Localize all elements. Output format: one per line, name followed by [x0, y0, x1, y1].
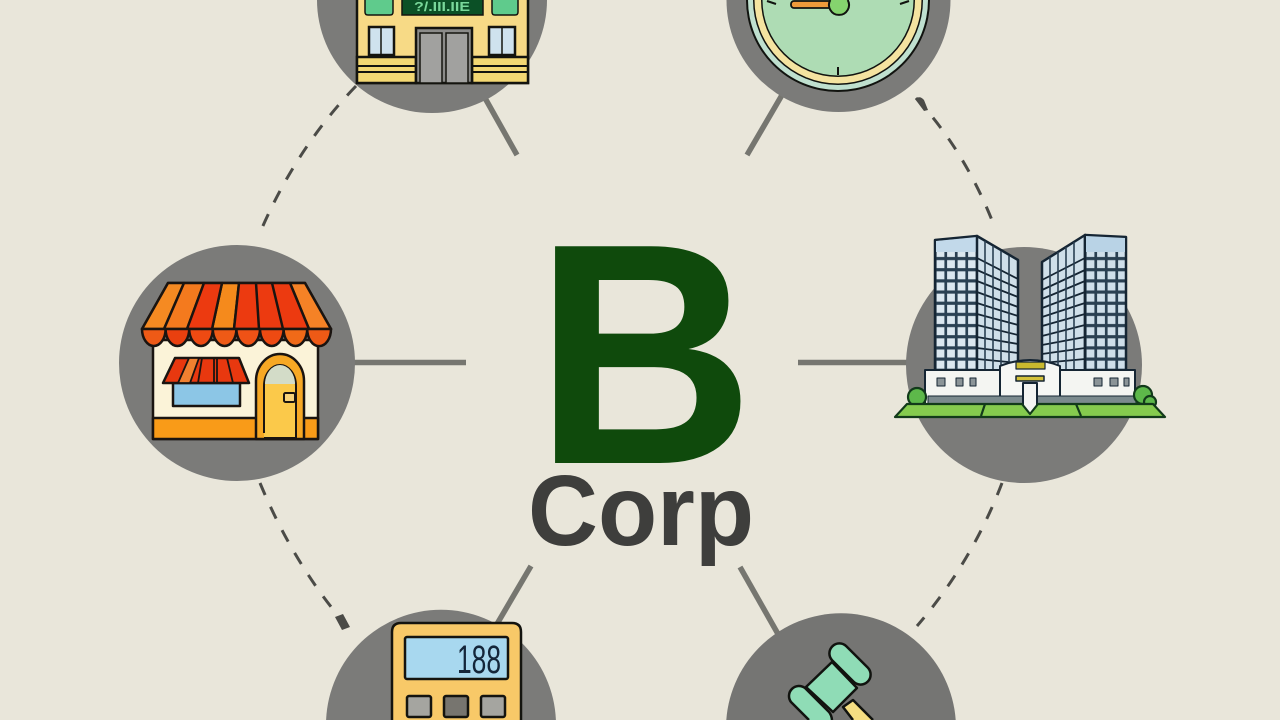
- node: calculator: [326, 610, 556, 720]
- node disc: [317, 0, 547, 113]
- icon: building: [357, 0, 528, 83]
- arrow tip: upper right dashed arc: [915, 97, 928, 111]
- node disc: [119, 245, 355, 481]
- node disc: [906, 247, 1142, 483]
- spokes from the center to each node: [352, 95, 910, 634]
- center logo: [528, 178, 754, 567]
- icon: gavel: [789, 639, 875, 720]
- node disc: [726, 0, 951, 112]
- icon: shop: [142, 283, 331, 439]
- icon: calculator: [392, 623, 521, 720]
- word Corp: Corp: [528, 455, 754, 567]
- node: corporate towers: [895, 235, 1165, 483]
- node: gauge: [726, 0, 951, 112]
- node: gavel: [726, 613, 956, 720]
- arrow tip: lower left dashed arc: [335, 614, 350, 630]
- big letter B: B: [535, 178, 754, 530]
- node: commercial building: [317, 0, 547, 113]
- dashed ring connecting the nodes: [260, 86, 1002, 626]
- node: storefront: [119, 245, 355, 481]
- icon: dial: [746, 0, 930, 92]
- icon: office towers: [925, 235, 1136, 415]
- node disc: [726, 613, 956, 720]
- icon: lawn and shrubs: [895, 386, 1165, 417]
- display reading: 188: [457, 638, 501, 682]
- node disc: [326, 610, 556, 720]
